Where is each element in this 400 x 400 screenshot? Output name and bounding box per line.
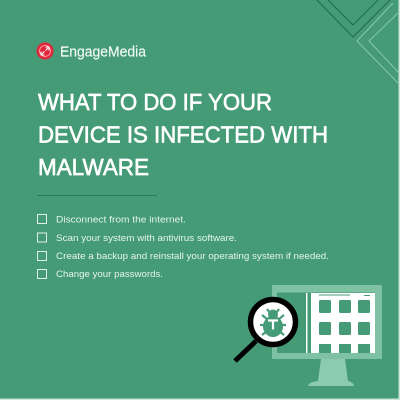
title: MALWARE	[38, 154, 149, 180]
title: DEVICE IS INFECTED WITH	[38, 122, 328, 148]
illustration: monitor	[272, 285, 382, 386]
title	[38, 89, 328, 180]
item: scan: Scan your system with antivirus software.	[56, 233, 237, 244]
divider	[37, 195, 157, 196]
item: passwords: Change your passwords.	[56, 269, 163, 280]
title: WHAT TO DO IF YOUR	[38, 89, 272, 115]
item: backup: Create a backup and reinstall your operating system if needed.	[56, 251, 329, 262]
logo: EngageMedia: EngageMedia	[60, 44, 147, 60]
decorative chevrons: top right	[317, 0, 398, 83]
item: disconnect: Disconnect from the internet.	[56, 214, 186, 226]
checklist	[38, 214, 329, 280]
icon: magnifying glass with bug	[235, 300, 296, 361]
